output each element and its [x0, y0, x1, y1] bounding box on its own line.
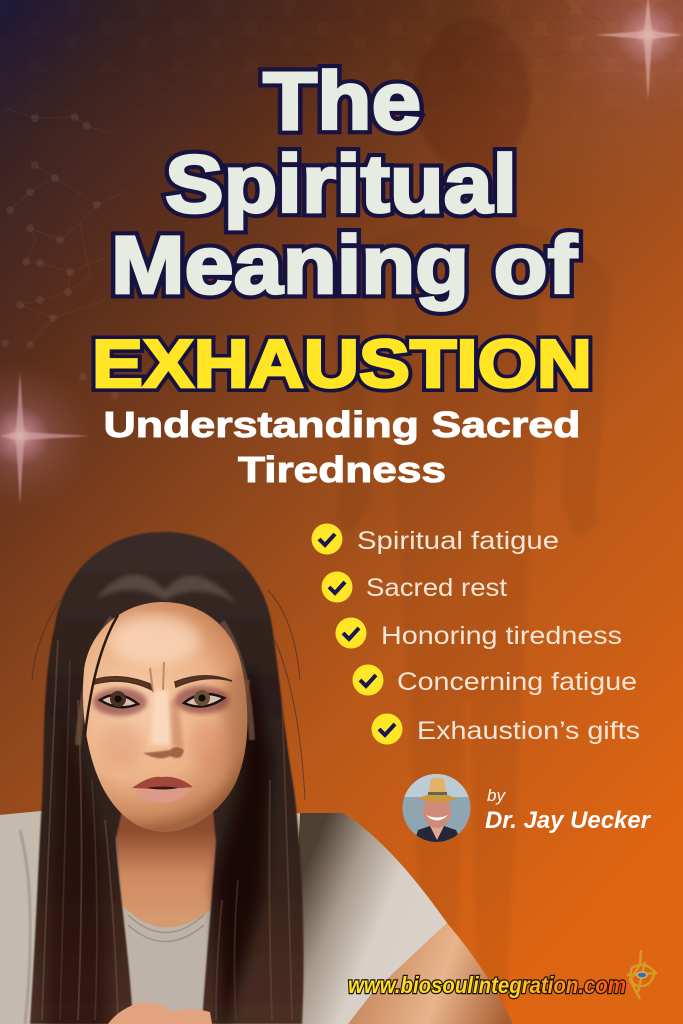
title weight overlay — [92, 56, 592, 402]
face — [83, 602, 260, 833]
brows — [94, 676, 232, 690]
title weight overlay: Meaning of — [111, 220, 578, 311]
item: Sacred rest: Sacred rest — [366, 574, 507, 602]
item: Sacred rest — [322, 572, 507, 602]
item: Honoring tiredness: Honoring tiredness — [381, 622, 622, 650]
author byline — [485, 786, 652, 834]
item: Concerning fatigue: Concerning fatigue — [397, 668, 637, 696]
icon: star sparkle top right — [595, 0, 683, 100]
t-shirt — [0, 811, 447, 1024]
hair depth shadow — [45, 660, 272, 1024]
author photo — [402, 773, 472, 843]
flyaway hairs — [32, 590, 305, 800]
side hair near face — [78, 618, 252, 745]
hair crown highlight — [95, 575, 238, 605]
subtitle: Tiredness — [238, 449, 446, 490]
neck — [112, 790, 228, 928]
author byline: Dr. Jay Uecker — [485, 807, 652, 834]
illustration: frustrated woman — [0, 532, 513, 1024]
hair strands — [42, 640, 292, 1020]
front hair wisp — [85, 615, 118, 735]
hand — [108, 1002, 212, 1024]
item: Honoring tiredness — [336, 618, 622, 650]
background: faint human silhouette — [330, 19, 612, 1024]
title weight overlay: Spiritual — [165, 139, 517, 230]
website url: www.biosoulintegration.com — [348, 972, 626, 998]
hair back — [30, 532, 304, 1024]
item: Exhaustion's gifts — [372, 714, 640, 745]
item: Exhaustion's gifts: Exhaustion’s gifts — [417, 717, 640, 745]
title — [92, 56, 592, 402]
arm — [345, 923, 513, 1024]
icon: star sparkle left — [0, 372, 90, 505]
subtitle: Understanding Sacred — [104, 404, 580, 445]
title line: The: The — [263, 56, 421, 147]
title line: Meaning of: Meaning of — [111, 220, 578, 311]
nose — [143, 747, 184, 758]
mouth — [132, 777, 193, 803]
eyes — [93, 686, 229, 716]
item: Concerning fatigue — [352, 664, 637, 696]
subtitle — [104, 404, 580, 490]
title weight overlay: EXHAUSTION — [92, 326, 592, 402]
title weight overlay: The — [263, 56, 421, 147]
item: Spiritual fatigue: Spiritual fatigue — [357, 527, 559, 555]
frown lines — [150, 662, 164, 692]
title line: Spiritual: Spiritual — [165, 139, 517, 230]
item: Spiritual fatigue — [312, 524, 559, 555]
background: neural network lines — [1, 108, 127, 399]
icon: logo with eye — [627, 950, 657, 999]
checklist — [312, 524, 640, 745]
title highlight: EXHAUSTION: EXHAUSTION — [92, 326, 592, 402]
author byline: by — [487, 786, 506, 805]
